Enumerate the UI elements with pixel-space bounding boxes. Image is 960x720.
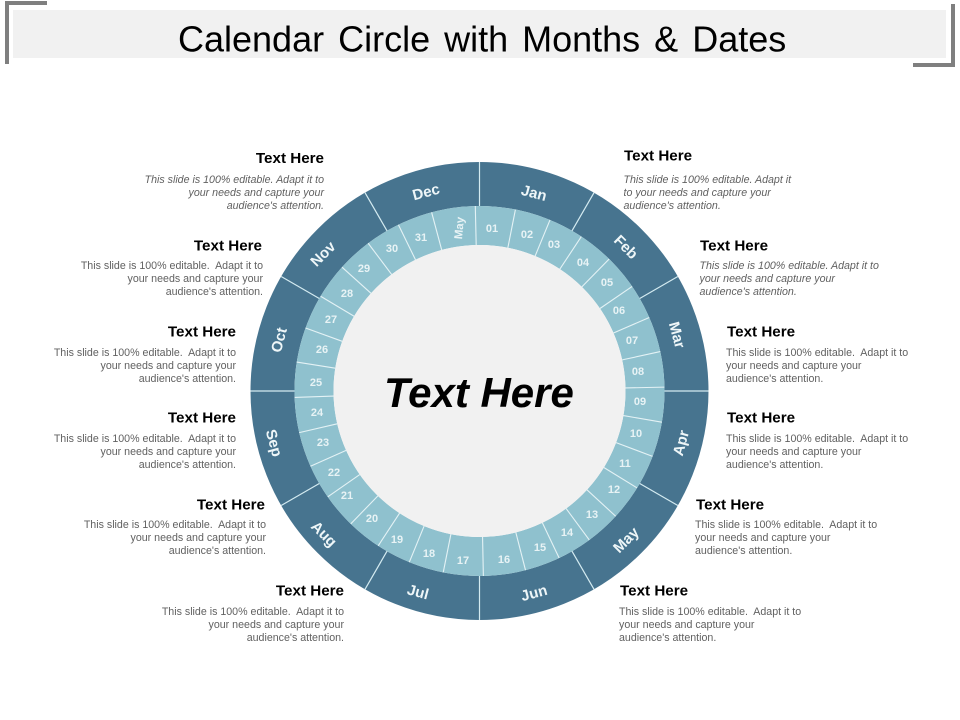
month labels — [262, 181, 693, 605]
text block: Dec: Text Here — [256, 150, 324, 167]
text block: Apr: Text Here — [727, 410, 795, 426]
text block: May: audience's attention. — [695, 545, 792, 557]
month labels: Jan — [519, 182, 549, 205]
date labels: 16 — [498, 554, 510, 566]
text block: Apr: This slide is 100% editable. Adapt it to — [726, 433, 908, 445]
text block: Dec — [145, 150, 324, 212]
month labels: Oct — [268, 326, 291, 354]
text block: Mar: This slide is 100% editable. Adapt it to — [726, 347, 908, 359]
date labels: 31 — [415, 232, 427, 244]
text block: Apr: your needs and capture your — [726, 446, 862, 458]
date labels: 23 — [317, 437, 329, 449]
text block: Aug: Text Here — [197, 496, 265, 514]
text block: Aug — [84, 496, 266, 557]
text block: Dec: This slide is 100% editable. Adapt it to — [145, 174, 324, 186]
calendar circle — [250, 162, 708, 620]
text block: Mar — [726, 324, 908, 385]
text block: Jun: Text Here — [620, 582, 688, 600]
text block: Jan: Text Here — [624, 148, 692, 164]
date labels: 19 — [391, 534, 403, 546]
text block: Aug: your needs and capture your — [131, 532, 266, 544]
date labels: 30 — [386, 243, 398, 255]
text block: Mar: audience's attention. — [726, 373, 823, 385]
date labels: 21 — [341, 490, 353, 502]
date labels: 12 — [608, 484, 620, 496]
date labels: 08 — [632, 366, 644, 378]
date labels: 09 — [634, 396, 646, 408]
text block: Jan: to your needs and capture your — [624, 187, 771, 199]
date labels: 26 — [316, 344, 328, 356]
text block: Jul: audience's attention. — [247, 632, 344, 644]
text block: Nov: audience's attention. — [166, 286, 263, 298]
date labels: 14 — [561, 527, 574, 539]
text block: Aug: This slide is 100% editable. Adapt it to — [84, 519, 266, 531]
text block: Nov: This slide is 100% editable. Adapt it to — [81, 260, 263, 272]
date labels: 05 — [601, 277, 613, 289]
text block: Oct: This slide is 100% editable. Adapt it to — [54, 347, 236, 359]
date labels: 01 — [486, 223, 498, 235]
bottom-right corner bracket — [913, 4, 955, 67]
month labels: Feb — [610, 232, 641, 263]
text block: Feb: your needs and capture your — [698, 273, 835, 285]
date labels — [310, 216, 646, 567]
text block: May — [695, 496, 877, 557]
text block: May: This slide is 100% editable. Adapt it to — [695, 519, 877, 531]
text block: Jun: your needs and capture your — [619, 619, 755, 631]
text block: Jun: audience's attention. — [619, 632, 716, 644]
date labels: 25 — [310, 377, 322, 389]
text block: Dec: audience's attention. — [227, 200, 324, 212]
inner date ring — [314, 226, 645, 556]
text block: Feb — [698, 238, 879, 298]
text block: Jul: your needs and capture your — [209, 619, 344, 631]
month labels: May — [610, 524, 643, 557]
text block: Oct: Text Here — [168, 324, 236, 340]
date labels: 07 — [626, 335, 638, 347]
date labels: May — [453, 216, 467, 240]
date labels: 27 — [325, 314, 337, 326]
text block: Sep: audience's attention. — [139, 459, 236, 471]
top-left corner bracket — [5, 1, 47, 64]
text block: Apr: audience's attention. — [726, 459, 823, 471]
text block: Mar: Text Here — [727, 324, 795, 340]
text block: Feb: Text Here — [700, 238, 768, 254]
date labels: 02 — [521, 229, 533, 241]
text block: Apr — [726, 410, 908, 471]
title: Calendar Circle with Months & Dates — [178, 18, 786, 60]
text block: Jun: This slide is 100% editable. Adapt it to — [619, 606, 801, 618]
month labels: Nov — [307, 238, 340, 270]
date labels: 10 — [630, 428, 642, 440]
date labels: 11 — [619, 458, 631, 470]
text block: May: your needs and capture your — [695, 532, 831, 544]
date labels: 28 — [341, 288, 353, 300]
text block: Jul — [162, 582, 344, 644]
text block: Jan: This slide is 100% editable. Adapt it — [624, 174, 792, 186]
month labels: Jul — [405, 581, 431, 603]
text block: Mar: your needs and capture your — [726, 360, 862, 372]
text block: Nov: Text Here — [194, 238, 262, 254]
text block: Jun — [619, 582, 801, 644]
text block: Oct: your needs and capture your — [101, 360, 236, 372]
date labels: 13 — [586, 509, 598, 521]
month labels: Sep — [262, 428, 285, 459]
date labels: 06 — [613, 305, 625, 317]
title bar — [13, 10, 946, 60]
date labels: 17 — [457, 555, 469, 567]
text block: Aug: audience's attention. — [169, 545, 266, 557]
text block: Oct — [54, 324, 236, 385]
text block: Nov: your needs and capture your — [128, 273, 263, 285]
text block: Sep: Text Here — [168, 410, 236, 426]
text block: Sep — [54, 410, 236, 471]
text block: Nov — [81, 238, 263, 298]
month labels: Mar — [665, 320, 688, 350]
text block: Oct: audience's attention. — [139, 373, 236, 385]
text block: Feb: This slide is 100% editable. Adapt it to — [700, 260, 879, 272]
center heading: Text Here — [384, 369, 574, 416]
date labels: 18 — [423, 548, 435, 560]
text block: Dec: your needs and capture your — [188, 187, 324, 199]
text block: Jul: This slide is 100% editable. Adapt it to — [162, 606, 344, 618]
text block: Sep: your needs and capture your — [101, 446, 236, 458]
date labels: 29 — [358, 263, 370, 275]
month labels: Aug — [307, 518, 340, 551]
text block: Jan — [624, 148, 792, 212]
date labels: 15 — [534, 542, 546, 554]
month labels: Dec — [411, 181, 442, 204]
text block: Jul: Text Here — [276, 582, 344, 600]
date labels: 22 — [328, 467, 340, 479]
date labels: 04 — [577, 257, 590, 269]
date labels: 03 — [548, 239, 560, 251]
date labels: 24 — [311, 407, 324, 419]
center disc — [334, 245, 626, 537]
month labels: Jun — [519, 582, 549, 605]
text block: Feb: audience's attention. — [700, 286, 797, 298]
text block: Sep: This slide is 100% editable. Adapt it to — [54, 433, 236, 445]
outer month ring — [272, 184, 686, 598]
text block: Jan: audience's attention. — [624, 200, 721, 212]
date labels: 20 — [366, 513, 378, 525]
month labels: Apr — [670, 428, 693, 458]
text block: May: Text Here — [696, 496, 764, 514]
